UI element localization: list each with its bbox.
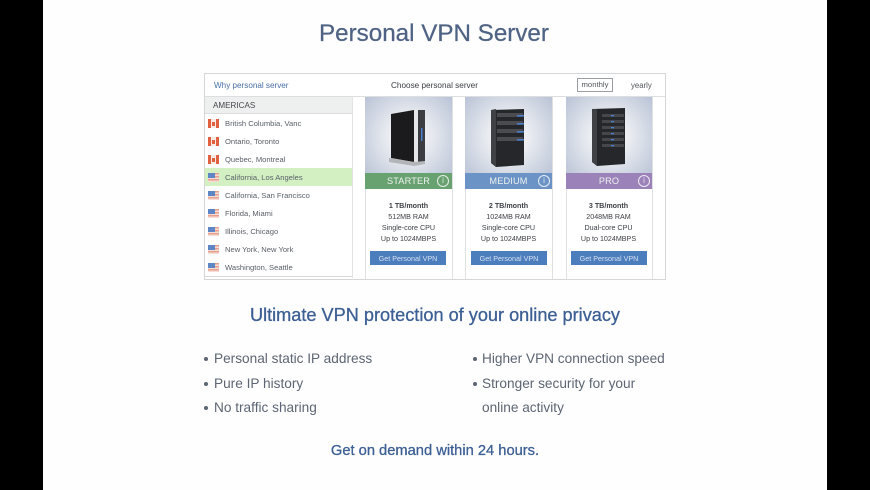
button: pro <box>571 251 647 265</box>
info icon: medium: i <box>543 176 545 185</box>
button: starter <box>370 251 446 265</box>
button: pro: Get Personal VPN <box>580 254 638 263</box>
list bottom line <box>205 276 352 277</box>
band: starter: STARTER <box>387 176 430 186</box>
specs: starter: Up to 1024MBPS <box>381 235 436 243</box>
benefits: right column <box>473 351 665 415</box>
location rows: Florida, Miami <box>225 209 273 218</box>
specs: pro <box>581 202 636 243</box>
title: Personal VPN Server <box>319 20 549 47</box>
location rows: Illinois, Chicago <box>225 227 278 236</box>
location rows: Ontario, Toronto <box>225 137 279 146</box>
location rows <box>225 119 310 272</box>
location rows: California, Los Angeles <box>225 173 303 182</box>
specs: starter: 512MB RAM <box>388 213 429 221</box>
link: why personal server: Why personal server <box>214 81 289 90</box>
specs: starter: Single-core CPU <box>382 224 435 232</box>
region header <box>205 97 352 114</box>
specs: medium: Single-core CPU <box>482 224 535 232</box>
benefits: right column: Stronger security for your <box>482 376 635 391</box>
flags: Canada <box>208 119 219 164</box>
server image: medium <box>465 97 552 173</box>
benefits: left column <box>204 351 372 415</box>
header divider <box>205 96 665 97</box>
benefits: left column: Pure IP history <box>214 376 303 391</box>
location rows: Washington, Seattle <box>225 263 293 272</box>
benefits: right column: online activity <box>482 400 564 415</box>
specs: pro: Dual-core CPU <box>584 224 632 232</box>
band: pro: PRO <box>599 176 619 186</box>
plan card: starter <box>365 97 453 279</box>
location rows: British Columbia, Vanc <box>225 119 301 128</box>
specs: starter <box>381 202 436 243</box>
info icon: pro: i <box>643 176 645 185</box>
info icon: medium <box>538 175 550 187</box>
location rows: Quebec, Montreal <box>225 155 285 164</box>
benefits: right column: Higher VPN connection speed <box>482 351 665 366</box>
toggle: monthly <box>577 78 613 92</box>
band: medium <box>465 173 552 189</box>
benefits: left column: Personal static IP address <box>214 351 372 366</box>
band: starter <box>365 173 452 189</box>
specs: medium: Up to 1024MBPS <box>481 235 536 243</box>
location rows: New York, New York <box>225 245 293 254</box>
plan card: medium <box>465 97 553 279</box>
specs: medium <box>481 202 536 243</box>
selected row <box>205 168 352 186</box>
flags: USA <box>208 173 219 272</box>
specs: medium: 2 TB/month <box>489 202 528 210</box>
info icon: starter: i <box>442 176 444 185</box>
closing line: Get on demand within 24 hours. <box>331 443 539 459</box>
specs: pro: Up to 1024MBPS <box>581 235 636 243</box>
button: medium <box>471 251 547 265</box>
toggle: yearly: yearly <box>631 81 652 90</box>
subheading: Ultimate VPN protection of your online privacy <box>250 305 620 325</box>
band: medium: MEDIUM <box>489 176 528 186</box>
location rows: California, San Francisco <box>225 191 310 200</box>
server image: pro <box>566 97 652 173</box>
toggle: monthly: monthly <box>582 80 608 89</box>
benefits: left column: No traffic sharing <box>214 400 317 415</box>
panel: location list <box>205 97 353 278</box>
button: medium: Get Personal VPN <box>480 254 538 263</box>
specs: pro: 3 TB/month <box>589 202 628 210</box>
specs: pro: 2048MB RAM <box>586 213 631 221</box>
panel: server chooser <box>204 73 666 280</box>
info icon: starter <box>437 175 449 187</box>
plan card: pro <box>566 97 653 279</box>
server image: starter <box>365 97 452 173</box>
specs: medium: 1024MB RAM <box>486 213 531 221</box>
info icon: pro <box>638 175 650 187</box>
region label: AMERICAS <box>213 101 255 110</box>
heading: choose personal server: Choose personal server <box>391 81 478 90</box>
button: starter: Get Personal VPN <box>379 254 437 263</box>
band: pro <box>566 173 652 189</box>
specs: starter: 1 TB/month <box>389 202 428 210</box>
